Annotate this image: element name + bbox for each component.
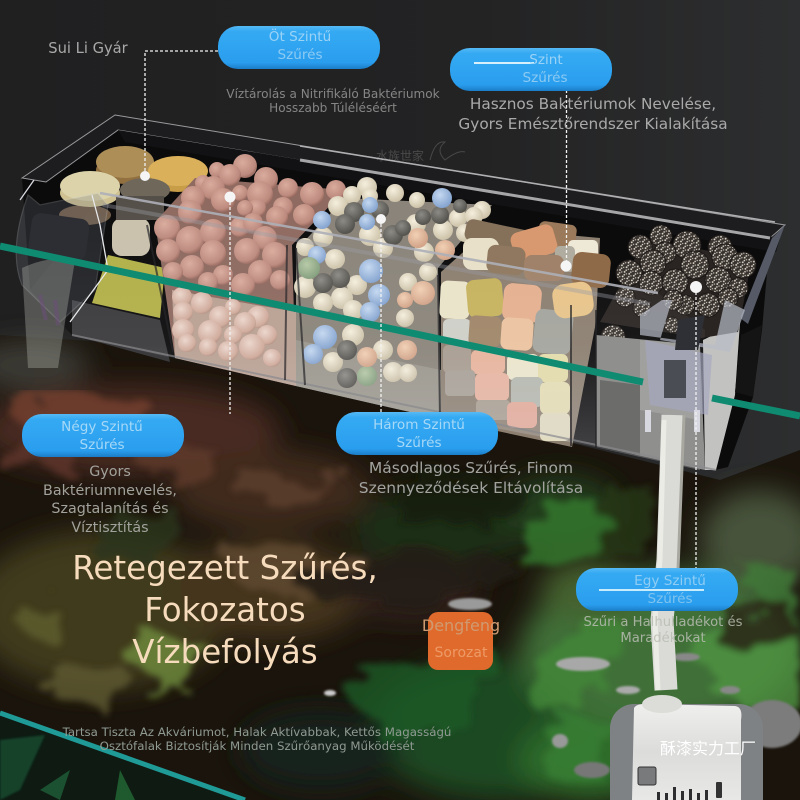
left outlet spout with falling water — [16, 180, 108, 368]
orange series badge — [422, 612, 500, 670]
level five description: Hosszabb Túléléséért — [269, 101, 397, 115]
level five pill: Öt Szintű — [269, 27, 331, 45]
leader line dots — [140, 171, 702, 293]
main heading: Fokozatos — [144, 591, 306, 629]
level one description — [583, 614, 743, 646]
level five pill: Szűrés — [277, 47, 323, 63]
factory label: 酥漆实力工厂 — [660, 739, 756, 758]
main heading — [72, 549, 378, 671]
watermark — [376, 142, 465, 163]
level four description — [43, 464, 177, 536]
level two description: Gyors Emésztőrendszer Kialakítása — [458, 115, 728, 133]
level two pill — [450, 48, 612, 91]
lower pink balls behind glass — [172, 287, 281, 367]
level two pill: Szűrés — [522, 70, 568, 86]
level three pill: Három Szintű — [373, 417, 465, 433]
level one pill: Szűrés — [647, 591, 693, 607]
level one description: Szűri a Halhulladékot és — [583, 614, 743, 630]
main heading: Vízbefolyás — [132, 633, 318, 671]
water pump — [610, 695, 763, 800]
level four pill — [22, 414, 184, 457]
level four description: Gyors — [89, 464, 131, 480]
level one description: Maradékokat — [620, 630, 706, 646]
translucent front wall of box — [30, 193, 716, 470]
box body and rim — [22, 115, 785, 470]
level one dark speckled balls — [601, 225, 756, 349]
level two description: Hasznos Baktériumok Nevelése, — [470, 95, 716, 113]
compartment fill behind the media — [155, 178, 752, 447]
level four pill: Szűrés — [79, 437, 125, 453]
level four description: Baktériumnevelés, — [43, 483, 177, 499]
filter box — [16, 115, 785, 470]
tagline: Osztófalak Biztosítják Minden Szűrőanyag Működését — [100, 739, 415, 753]
level three description: Szennyeződések Eltávolítása — [359, 479, 583, 497]
level three description — [359, 459, 583, 497]
level five description: Víztárolás a Nitrifikáló Baktériumok — [226, 87, 440, 101]
level three multicoloured balls — [294, 177, 491, 388]
tagline — [62, 725, 451, 753]
level one pill — [576, 568, 738, 611]
level four pill: Négy Szintű — [61, 419, 143, 435]
level two description — [458, 95, 728, 133]
watermark: 水族世家 — [376, 148, 424, 163]
water hose from pump to box — [655, 415, 684, 690]
bottom left glass edge with dark leaves — [0, 713, 245, 800]
level two pill: Szint — [529, 52, 563, 68]
level four description: Szagtalanítás és — [51, 501, 169, 517]
level four description: Víztisztítás — [71, 520, 149, 536]
level three pill: Szűrés — [396, 435, 442, 451]
level three description: Másodlagos Szűrés, Finom — [369, 459, 573, 477]
main heading: Retegezett Szűrés, — [72, 549, 378, 587]
dashed leader lines — [145, 51, 696, 568]
level five pill — [218, 26, 380, 69]
level three pill — [336, 412, 498, 455]
green glass edge — [0, 246, 800, 416]
level five filter discs and sponge — [59, 146, 208, 362]
brand label: Sui Li Gyár — [48, 40, 129, 57]
level one pill: Egy Szintű — [634, 573, 706, 589]
right inlet clip — [640, 300, 745, 432]
level two porous bricks — [439, 218, 612, 441]
tagline: Tartsa Tiszta Az Akváriumot, Halak Aktívabbak, Kettős Magasságú — [62, 725, 451, 739]
level four pink ceramic balls — [154, 154, 346, 297]
level five description — [226, 87, 440, 115]
orange series badge: Dengfeng — [422, 616, 500, 635]
orange series badge: Sorozat — [435, 645, 488, 661]
